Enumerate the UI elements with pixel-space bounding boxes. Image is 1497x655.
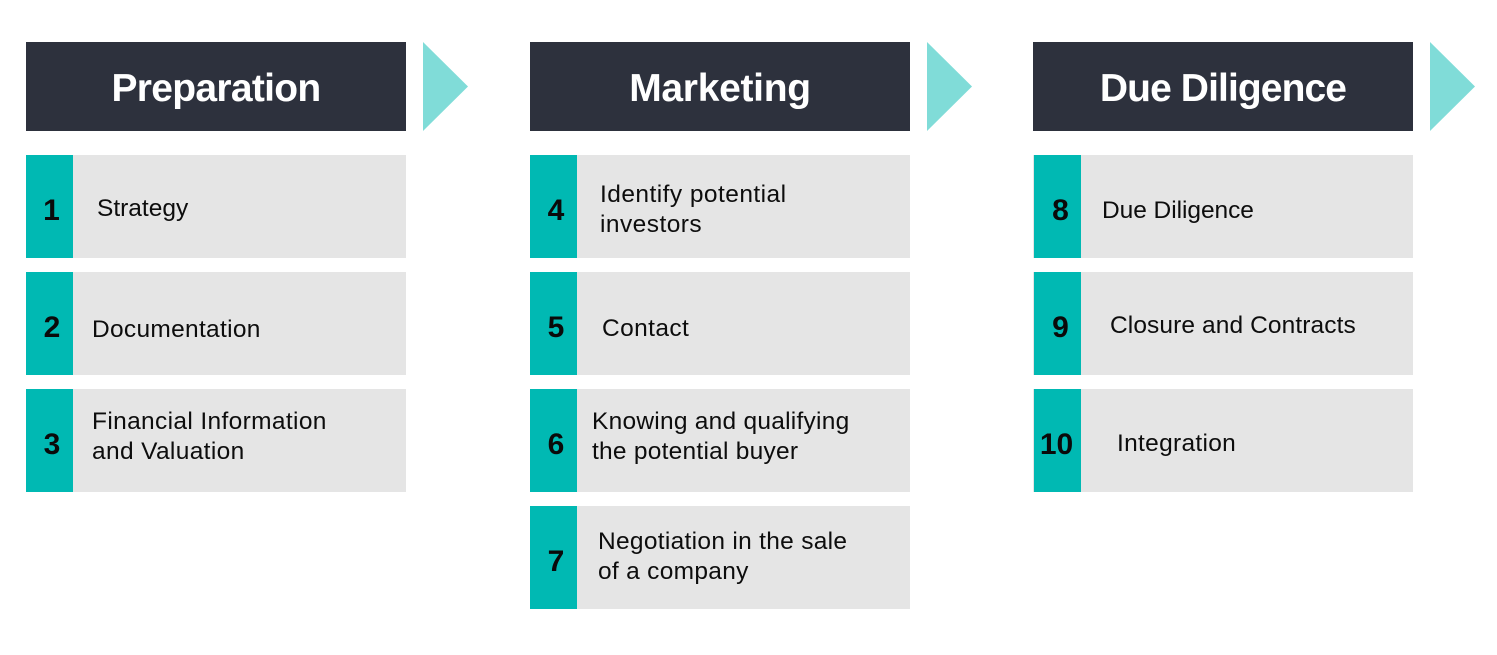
step 7: Negotiation in the sale of a company: 7 bbox=[548, 545, 564, 578]
step 8: Due Diligence: Due Diligence bbox=[1102, 197, 1254, 224]
step 8: Due Diligence bbox=[1033, 155, 1413, 258]
step 8: Due Diligence: 8 bbox=[1052, 194, 1069, 227]
step 10: Integration bbox=[1033, 389, 1413, 492]
step 5: Contact: Contact bbox=[602, 315, 689, 342]
step 4: Identify potential investors bbox=[530, 155, 910, 258]
step 3: Financial Information and Valuation: 3 bbox=[44, 428, 60, 461]
step 10: Integration: 10 bbox=[1040, 428, 1073, 461]
step 5: Contact bbox=[530, 272, 910, 375]
step 2: Documentation: 2 bbox=[44, 311, 60, 344]
header: Marketing: Marketing bbox=[629, 67, 811, 110]
step 6: Knowing and qualifying the potential buyer: 6 bbox=[548, 428, 564, 461]
step 1: Strategy: 1 bbox=[43, 194, 60, 227]
step 7: Negotiation in the sale of a company bbox=[530, 506, 910, 609]
step 6: Knowing and qualifying the potential buyer: the potential buyer bbox=[592, 438, 798, 465]
step 9: Closure and Contracts: 9 bbox=[1052, 311, 1069, 344]
step 5: Contact: 5 bbox=[548, 311, 564, 344]
step 6: Knowing and qualifying the potential buyer bbox=[530, 389, 910, 492]
step 1: Strategy bbox=[26, 155, 406, 258]
arrow: Marketing to Due Diligence bbox=[927, 42, 972, 131]
step 1: Strategy: Strategy bbox=[97, 195, 188, 222]
header: Preparation: Preparation bbox=[111, 67, 321, 110]
step 7: Negotiation in the sale of a company: of a company bbox=[598, 558, 749, 585]
header: Due Diligence bbox=[1033, 42, 1413, 131]
step 4: Identify potential investors: Identify potential bbox=[600, 181, 787, 208]
step 3: Financial Information and Valuation: and Valuation bbox=[92, 438, 245, 465]
step 10: Integration: Integration bbox=[1117, 430, 1236, 457]
step 3: Financial Information and Valuation: Financial Information bbox=[92, 408, 327, 435]
step 4: Identify potential investors: investors bbox=[600, 211, 702, 238]
step 2: Documentation: Documentation bbox=[92, 316, 261, 343]
step 4: Identify potential investors: 4 bbox=[548, 194, 564, 227]
arrow: Preparation to Marketing bbox=[423, 42, 468, 131]
header: Due Diligence: Due Diligence bbox=[1100, 67, 1346, 110]
step 9: Closure and Contracts bbox=[1033, 272, 1413, 375]
step 7: Negotiation in the sale of a company: Negotiation in the sale bbox=[598, 528, 847, 555]
arrow: after Due Diligence bbox=[1430, 42, 1475, 131]
step 6: Knowing and qualifying the potential buyer: Knowing and qualifying bbox=[592, 408, 850, 435]
header: Preparation bbox=[26, 42, 406, 131]
step 3: Financial Information and Valuation bbox=[26, 389, 406, 492]
header: Marketing bbox=[530, 42, 910, 131]
step 9: Closure and Contracts: Closure and Contracts bbox=[1110, 312, 1356, 339]
step 2: Documentation bbox=[26, 272, 406, 375]
